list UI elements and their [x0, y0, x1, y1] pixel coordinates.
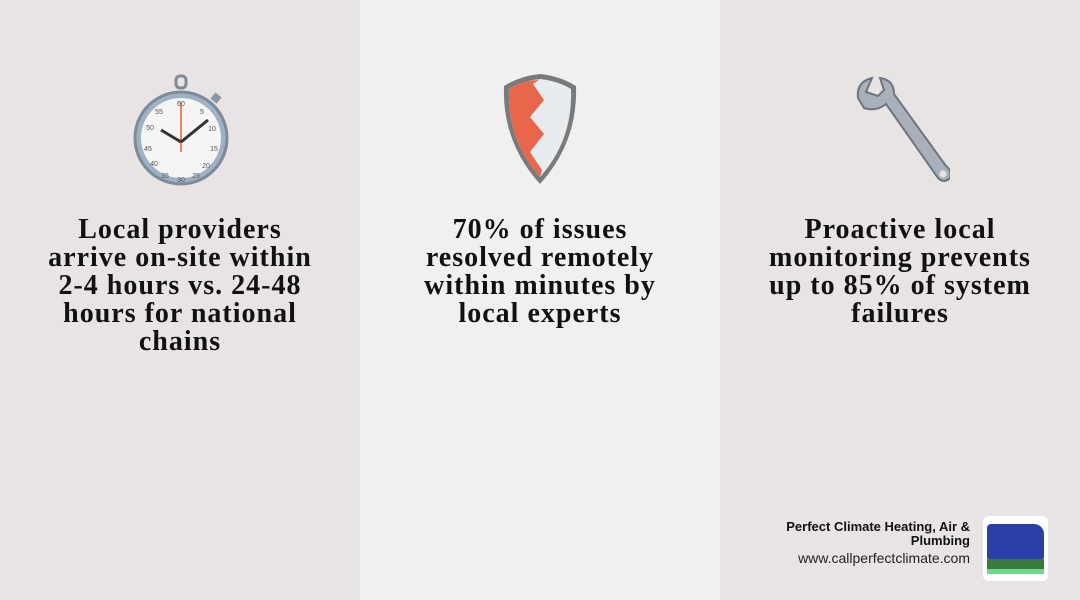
logo: van: [983, 516, 1048, 581]
icon: stopwatch: 50: [146, 125, 154, 132]
text: monitoring: [769, 214, 1031, 329]
icon: stopwatch: 35: [161, 173, 169, 180]
icon: stopwatch: 10: [208, 126, 216, 133]
text: response time: Local providers: [78, 214, 282, 245]
text: remote resolution: local experts: [458, 298, 622, 329]
icon: stopwatch: 55: [155, 109, 163, 116]
text: monitoring: Proactive local: [804, 214, 995, 245]
text: response time: hours for national: [63, 298, 297, 329]
icon: stopwatch: 60: [177, 101, 185, 108]
brand text: Perfect Climate Heating, Air & Plumbing: [786, 519, 970, 548]
text: monitoring: monitoring prevents: [769, 242, 1031, 273]
website: www.callperfectclimate.com: [798, 550, 970, 566]
panel: proactive monitoring: [720, 0, 1080, 600]
icon: shield: [504, 74, 576, 184]
text: remote resolution: 70% of issues: [453, 214, 627, 245]
text: response time: arrive on-site within: [48, 242, 312, 273]
icon: stopwatch: [134, 74, 228, 186]
icon: stopwatch: 15: [210, 146, 218, 153]
footer: brand: [786, 516, 1048, 581]
text: response time: chains: [139, 326, 221, 357]
text: monitoring: up to 85% of system: [769, 270, 1031, 301]
icon: stopwatch: 30: [177, 177, 185, 184]
text: remote resolution: [424, 214, 656, 329]
text: remote resolution: resolved remotely: [426, 242, 654, 273]
text: response time: [48, 214, 312, 357]
text: response time: 2-4 hours vs. 24-48: [58, 270, 302, 301]
panel: response time: [0, 0, 360, 600]
icon: stopwatch: 45: [144, 146, 152, 153]
text: monitoring: failures: [851, 298, 949, 329]
panel: remote resolution: [360, 0, 720, 600]
icon: stopwatch: 40: [150, 161, 158, 168]
icon: stopwatch: 20: [202, 163, 210, 170]
icon: stopwatch: 25: [192, 173, 200, 180]
icon: stopwatch: 5: [200, 109, 204, 116]
icon: wrench: [856, 76, 950, 182]
text: remote resolution: within minutes by: [424, 270, 656, 301]
